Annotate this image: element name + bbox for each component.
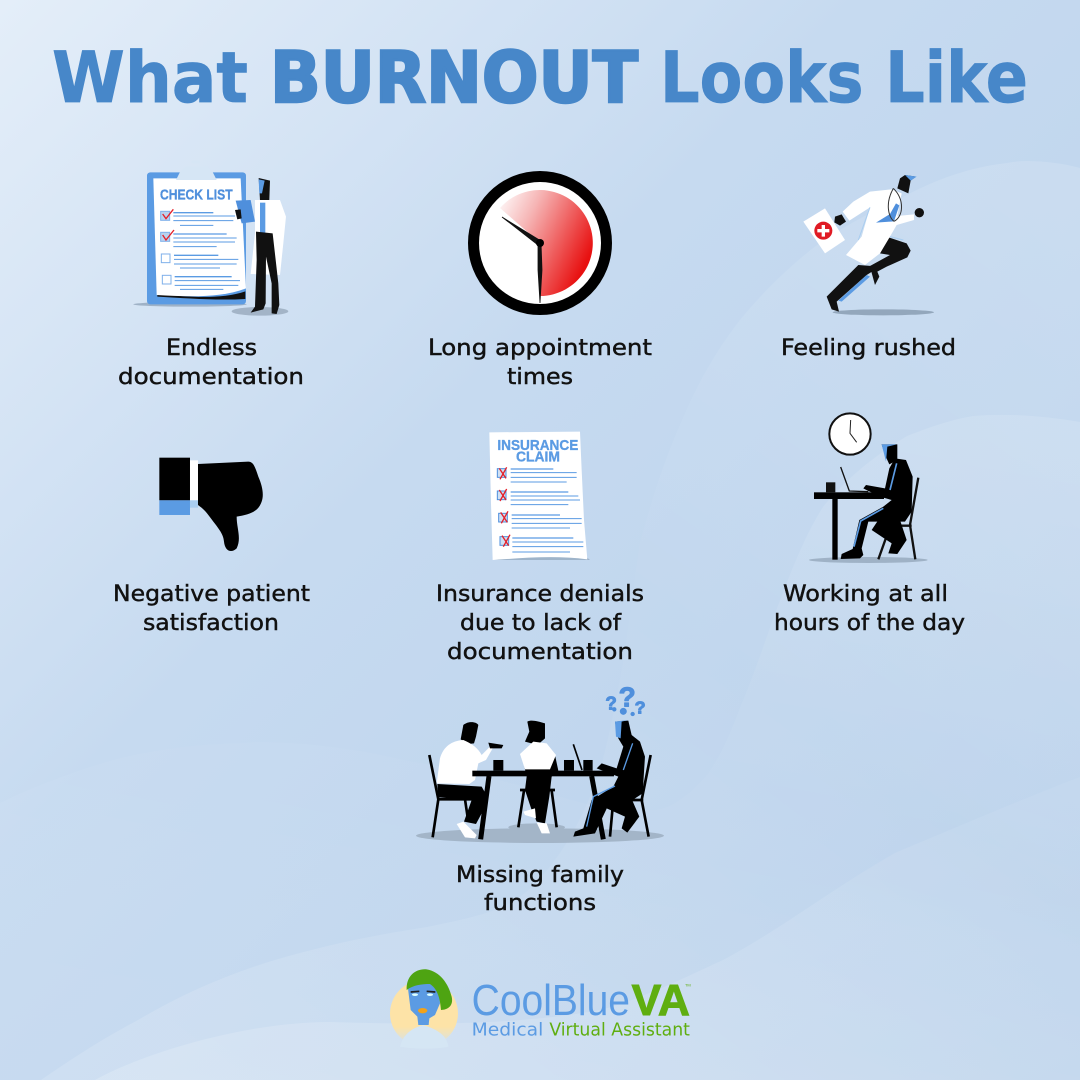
icon: insurance claim: INSURANCE: [497, 438, 578, 454]
label: Endless documentation: documentation: [118, 364, 304, 390]
icon: thumbs down: [159, 458, 263, 551]
question marks: ?: [635, 697, 646, 717]
label: Negative patient satisfaction: satisfaction: [143, 610, 279, 636]
logo wordmark: VA: [632, 976, 690, 1025]
label: Insurance denials due to lack of documentation: Insurance denials: [436, 581, 644, 607]
label: Missing family functions: functions: [484, 890, 596, 916]
label: Insurance denials due to lack of documentation: documentation: [447, 639, 633, 665]
question marks: [605, 682, 646, 717]
label: Working at all hours of the day: [774, 581, 965, 636]
question marks: ?: [619, 682, 636, 713]
label: Negative patient satisfaction: Negative patient: [113, 581, 310, 607]
label: Endless documentation: Endless: [166, 335, 257, 361]
label: Long appointment times: Long appointment: [428, 335, 652, 361]
label: Long appointment times: [428, 335, 652, 390]
label: Endless documentation: [118, 335, 304, 390]
label: Working at all hours of the day: hours of the day: [774, 610, 965, 636]
icon: running doctor: [803, 175, 934, 315]
label: Feeling rushed: Feeling rushed: [781, 335, 956, 361]
logo wordmark: [472, 976, 691, 1041]
label: Long appointment times: times: [507, 364, 573, 390]
icon: checklist and doctor: [133, 161, 288, 316]
icon: family at table: [416, 682, 664, 843]
left figure: [429, 722, 503, 838]
logo wordmark: Virtual Assistant: [549, 1020, 690, 1041]
icon: checklist and doctor: CHECK LIST: [160, 188, 233, 204]
middle figure: [518, 721, 558, 833]
icon: clock: [474, 176, 606, 310]
title: [52, 37, 1028, 119]
label: Insurance denials due to lack of documentation: due to lack of: [460, 610, 622, 636]
right figure: [573, 720, 651, 837]
title: BURNOUT: [270, 37, 638, 119]
icon: insurance claim: [489, 432, 590, 560]
table and mugs: [472, 744, 614, 839]
label: Insurance denials due to lack of documentation: [436, 581, 644, 665]
label: Missing family functions: Missing family: [456, 862, 624, 888]
title: What: [52, 37, 248, 119]
icon: working at desk: [809, 413, 928, 563]
icon: insurance claim: CLAIM: [516, 450, 560, 466]
label: Negative patient satisfaction: [113, 581, 310, 636]
logo wordmark: CoolBlue: [472, 977, 630, 1025]
logo: [390, 969, 691, 1049]
logo wordmark: TM: [685, 983, 691, 988]
question marks: ?: [605, 692, 617, 713]
logo avatar: [390, 969, 458, 1049]
label: Missing family functions: [456, 862, 624, 916]
label: Working at all hours of the day: Working at all: [783, 581, 948, 607]
logo wordmark: Medical: [472, 1020, 543, 1041]
title: Looks Like: [660, 37, 1028, 119]
